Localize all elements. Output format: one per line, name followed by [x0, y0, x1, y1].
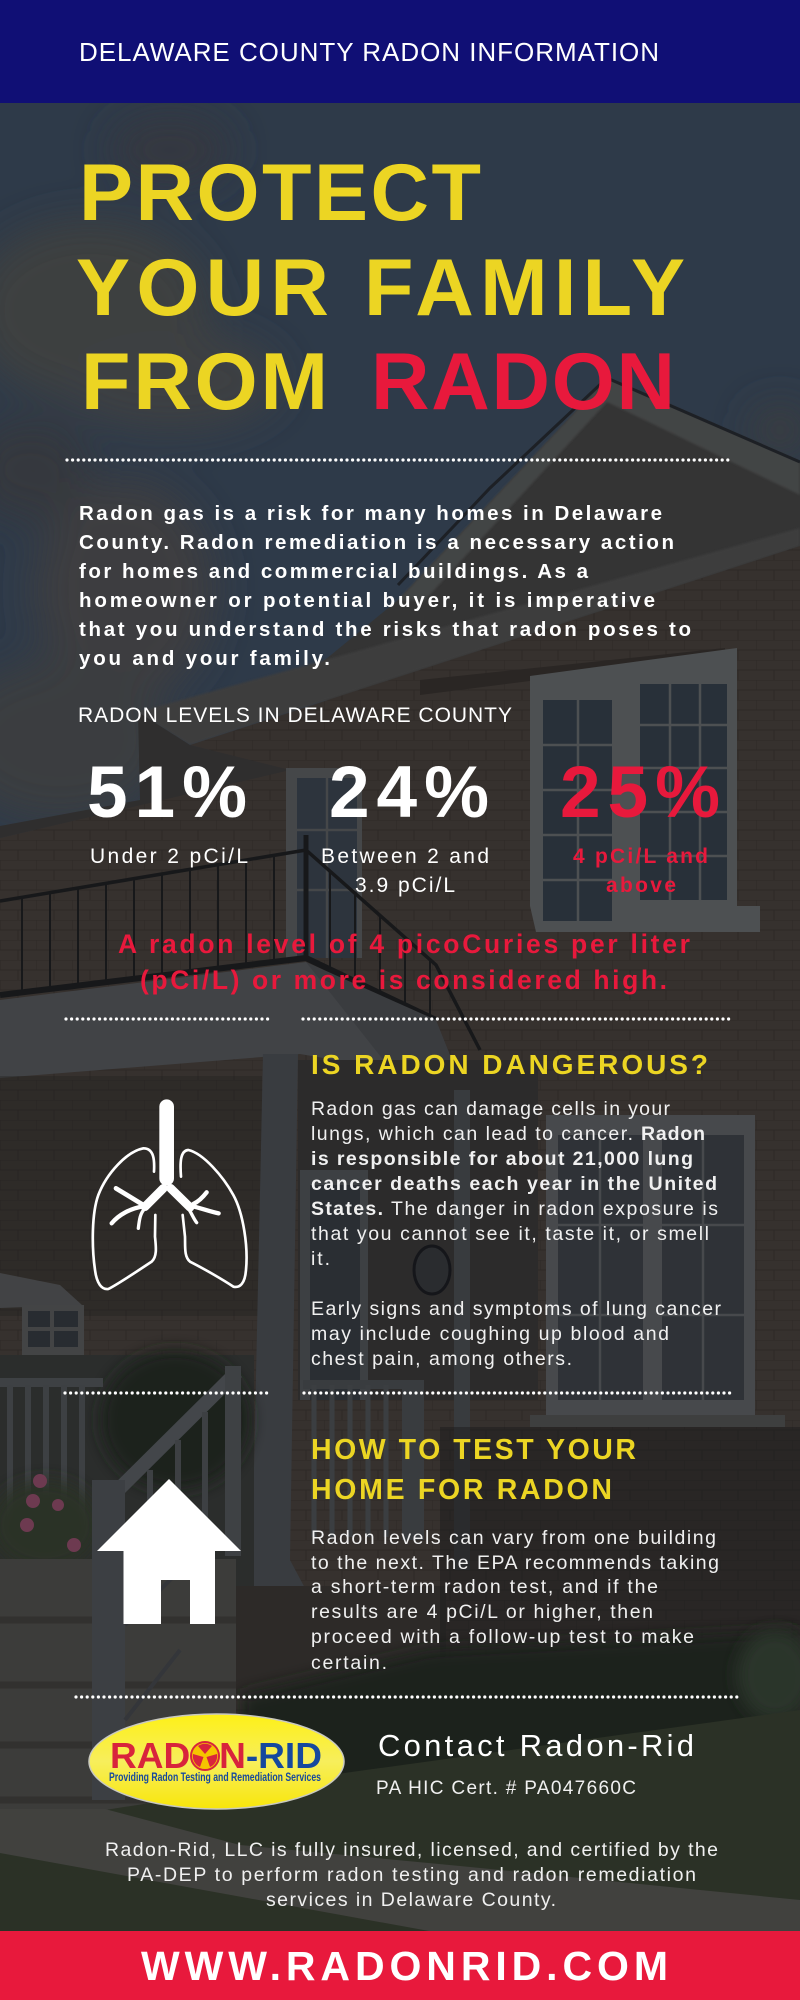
icon: lungs: [93, 1107, 247, 1289]
brick wall: [0, 546, 800, 1720]
certification note: services in Delaware County.: [266, 1889, 556, 1911]
upper right window: [530, 648, 760, 932]
section body text: that you cannot see it, taste it, or smell: [311, 1223, 709, 1245]
section body text: lungs, which can lead to cancer.: [311, 1123, 633, 1145]
porch column: [236, 1054, 306, 1590]
section body text: it.: [311, 1248, 330, 1270]
stat: 51 percent: [87, 752, 248, 868]
radon levels heading: RADON LEVELS IN DELAWARE COUNTY: [78, 704, 512, 727]
middle window: [286, 768, 362, 958]
logo: Radon-Rid: [89, 1714, 344, 1809]
contact block: Contact Radon-Rid: [378, 1728, 694, 1763]
title: RADON: [371, 337, 675, 427]
intro paragraph: [79, 502, 691, 670]
logo: Radon-Rid: RADON-RID: [110, 1735, 322, 1776]
stat: 25 percent: 25%: [560, 752, 720, 833]
intro paragraph: you and your family.: [79, 647, 330, 670]
icon: house: [97, 1479, 241, 1624]
certification note: [105, 1839, 718, 1911]
section body text: results are 4 pCi/L or higher, then: [311, 1601, 653, 1623]
section body text: may include coughing up blood and: [311, 1323, 669, 1345]
stat: 51 percent: 51%: [87, 752, 247, 833]
intro paragraph: Radon gas is a risk for many homes in Delaware: [79, 502, 662, 525]
lawn and walkway: [0, 1710, 800, 1933]
stat: 25 percent: [560, 752, 720, 897]
stat: 24 percent: 3.9 pCi/L: [355, 874, 455, 897]
stat: 25 percent: above: [606, 874, 676, 897]
certification note: PA-DEP to perform radon testing and radon remediation: [127, 1864, 696, 1886]
icon: radiation symbol: [191, 1742, 219, 1770]
intro paragraph: homeowner or potential buyer, it is imperative: [79, 589, 655, 612]
section body text: is responsible for about 21,000 lung: [311, 1148, 693, 1170]
footer bar: [0, 1931, 800, 2000]
section body text: Early signs and symptoms of lung cancer: [311, 1298, 722, 1320]
section: how to test: [311, 1434, 719, 1674]
high level warning: [118, 929, 690, 995]
stair rail: [108, 1366, 241, 1560]
section body text: Radon: [641, 1123, 705, 1145]
stat: 24 percent: 24%: [329, 752, 489, 833]
header text: DELAWARE COUNTY RADON INFORMATION: [79, 37, 659, 67]
section heading: IS RADON DANGEROUS?: [311, 1049, 708, 1080]
section body text: Radon levels can vary from one building: [311, 1527, 716, 1549]
website: WWW.RADONRID.COM: [141, 1943, 668, 1989]
stat: 51 percent: Under 2 pCi/L: [90, 845, 248, 868]
section body text: Radon gas can damage cells in your: [311, 1098, 670, 1120]
lower right window: [530, 1115, 785, 1427]
brick base and dark shrubs: [236, 1427, 800, 1790]
section body text: [311, 1098, 722, 1370]
porch roof: [0, 962, 470, 1150]
wall lamp: [414, 1246, 450, 1294]
section body text: a short-term radon test, and if the: [311, 1576, 658, 1598]
top header bar: [0, 0, 800, 103]
left porch railing: [0, 1378, 103, 1525]
section body text: certain.: [311, 1652, 387, 1674]
section body text: [311, 1527, 719, 1674]
right porch railing: [303, 1380, 424, 1540]
section body text: States.: [311, 1198, 383, 1220]
high level warning: (pCi/L) or more is considered high.: [140, 965, 667, 995]
title: [76, 148, 685, 427]
section heading: HOME FOR RADON: [311, 1474, 612, 1506]
section: is radon dangerous: [311, 1049, 722, 1370]
front steps: [0, 1480, 236, 1814]
door surround: [300, 1090, 470, 1570]
section body text: chest pain, among others.: [311, 1348, 572, 1370]
stat: 25 percent: 4 pCi/L and: [573, 845, 708, 868]
stat: 24 percent: Between 2 and: [321, 845, 489, 868]
intro paragraph: that you understand the risks that radon poses to: [79, 618, 691, 641]
upper gable: [138, 378, 800, 745]
section body text: cancer deaths each year in the United: [311, 1173, 717, 1195]
logo: Radon-Rid: Providing Radon Testing and Remediation Services: [109, 1772, 321, 1784]
title: PROTECT: [79, 148, 481, 238]
contact block: [376, 1728, 694, 1799]
shrub flowers: [0, 1474, 100, 1570]
section body text: proceed with a follow-up test to make: [311, 1626, 694, 1648]
intro paragraph: County. Radon remediation is a necessary action: [79, 531, 674, 554]
certification note: Radon-Rid, LLC is fully insured, licensed, and certified by the: [105, 1839, 718, 1861]
section heading: [311, 1434, 636, 1506]
section body text: to the next. The EPA recommends taking: [311, 1552, 719, 1574]
stat: 24 percent: [321, 752, 489, 897]
balcony railing: [0, 835, 480, 1050]
title: YOUR FAMILY: [76, 243, 685, 333]
title: FROM: [81, 337, 328, 427]
section heading: HOW TO TEST YOUR: [311, 1434, 636, 1466]
small side roof and window: [0, 1273, 84, 1355]
section body text: The danger in radon exposure is: [391, 1198, 718, 1220]
high level warning: A radon level of 4 picoCuries per liter: [118, 929, 690, 959]
contact block: PA HIC Cert. # PA047660C: [376, 1778, 636, 1799]
intro paragraph: for homes and commercial buildings. As a: [79, 560, 589, 583]
